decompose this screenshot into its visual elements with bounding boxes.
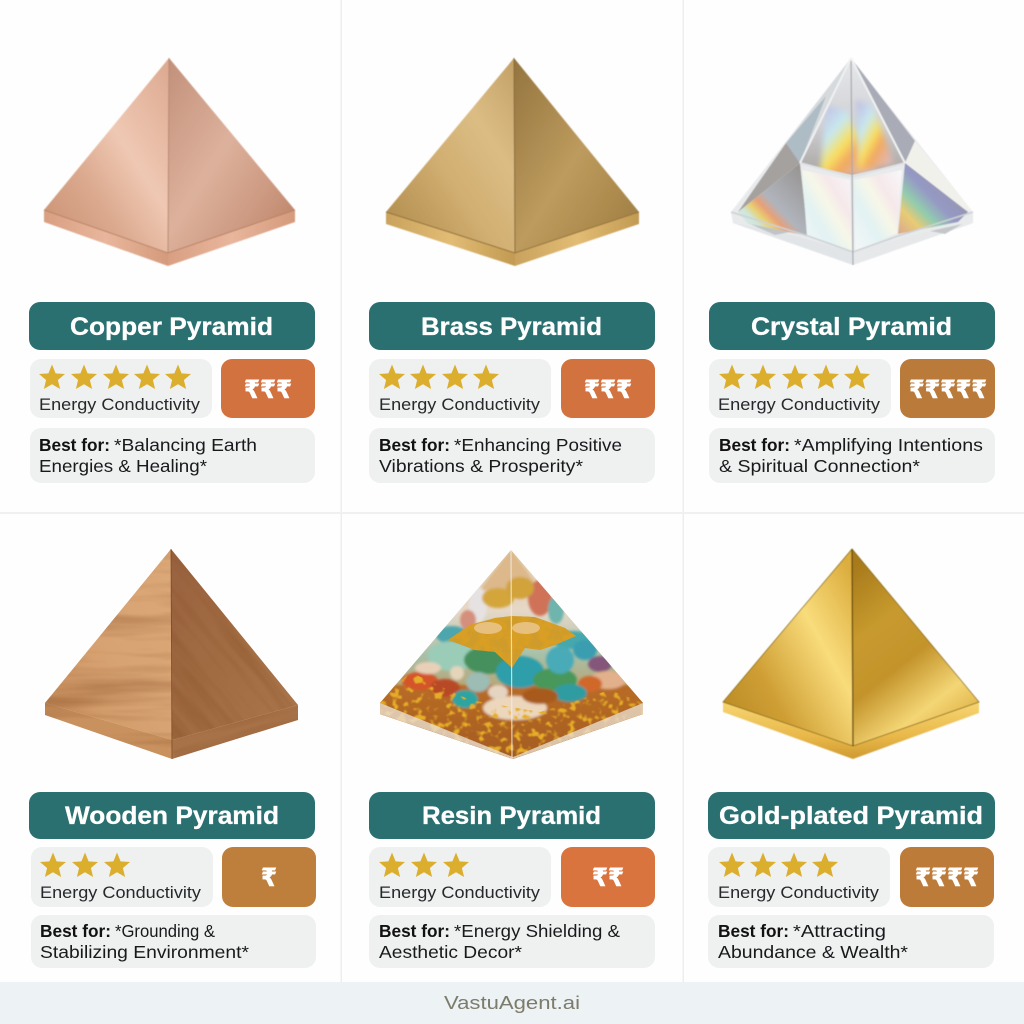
best for: brass [369, 428, 655, 483]
price badge: three rupees: ₹₹₹ [584, 375, 632, 404]
best for: copper: Best for: [39, 435, 110, 455]
rating card: 3 stars energy conductivity [369, 847, 551, 907]
price badge: four rupees: ₹₹₹₹ [915, 863, 979, 892]
rating card: 3 stars energy conductivity [31, 847, 213, 907]
best for: gold: Abundance & Wealth* [718, 942, 908, 962]
panel: Resin Pyramid [369, 545, 655, 968]
title bar: Wooden Pyramid: Wooden Pyramid [65, 802, 279, 830]
rating card: 5 stars energy conductivity [30, 359, 212, 418]
best for: wood: Stabilizing Environment* [40, 942, 249, 962]
footer [0, 982, 1024, 1024]
best for: wood [31, 915, 316, 968]
title bar: Brass Pyramid [369, 302, 655, 350]
title bar: Copper Pyramid [29, 302, 315, 350]
best for: gold: *Attracting [793, 921, 886, 941]
rating card: 5 stars energy conductivity: Energy Conductivity [39, 396, 201, 414]
footer: VastuAgent.ai [444, 992, 580, 1013]
pyramid image: resin orgonite [380, 550, 643, 759]
pyramid image: crystal [731, 58, 973, 265]
price badge: four rupees [900, 847, 994, 907]
rating card: 5 stars energy conductivity: Energy Conductivity [718, 396, 881, 414]
title bar: Copper Pyramid: Copper Pyramid [70, 313, 273, 341]
price badge: one rupee: ₹ [261, 863, 277, 892]
best for: gold: Best for: [718, 921, 789, 941]
panel: Crystal Pyramid [709, 58, 995, 483]
best for: wood: *Grounding & [115, 921, 215, 941]
title bar: Wooden Pyramid [29, 792, 315, 839]
pyramid image: gold [723, 549, 979, 759]
price badge: two rupees [561, 847, 655, 907]
rating card: 4 stars energy conductivity: Energy Conductivity [379, 396, 541, 414]
price badge: three rupees [221, 359, 315, 418]
panel: Brass Pyramid [369, 58, 655, 483]
best for: crystal: *Amplifying Intentions [794, 435, 983, 455]
best for: resin: *Energy Shielding & [454, 921, 620, 941]
best for: resin: Aesthetic Decor* [379, 942, 522, 962]
title bar: Crystal Pyramid [709, 302, 995, 350]
title bar: Resin Pyramid [369, 792, 655, 839]
best for: crystal [709, 428, 995, 483]
best for: wood: Best for: [40, 921, 111, 941]
best for: brass: *Enhancing Positive [454, 435, 622, 455]
rating card: 4 stars energy conductivity [708, 847, 890, 907]
title bar: Resin Pyramid: Resin Pyramid [422, 802, 601, 830]
title bar: Gold-plated Pyramid [708, 792, 995, 839]
best for: crystal: Best for: [719, 435, 790, 455]
best for: copper [30, 428, 315, 483]
panel: Wooden Pyramid [29, 549, 316, 968]
price badge: five rupees: ₹₹₹₹₹ [909, 375, 987, 404]
rating card: 5 stars energy conductivity [709, 359, 891, 418]
price badge: two rupees: ₹₹ [592, 863, 624, 892]
best for: copper: *Balancing Earth [114, 435, 257, 455]
best for: copper: Energies & Healing* [39, 456, 207, 476]
best for: resin [369, 915, 655, 968]
price badge: three rupees [561, 359, 655, 418]
rating card: 4 stars energy conductivity: Energy Conductivity [718, 884, 880, 902]
best for: brass: Vibrations & Prosperity* [379, 456, 583, 476]
price badge: five rupees [900, 359, 995, 418]
best for: resin: Best for: [379, 921, 450, 941]
best for: crystal: & Spiritual Connection* [719, 456, 920, 476]
rating card: 4 stars energy conductivity [369, 359, 551, 418]
pyramid image: brass [386, 58, 639, 266]
title bar: Brass Pyramid: Brass Pyramid [421, 313, 602, 341]
pyramid image: wood [45, 549, 298, 759]
price badge: one rupee [222, 847, 316, 907]
pyramid image: copper [44, 58, 295, 266]
price badge: three rupees: ₹₹₹ [244, 375, 292, 404]
panel: Copper Pyramid [29, 58, 315, 483]
rating card: 3 stars energy conductivity: Energy Conductivity [40, 884, 202, 902]
title bar: Gold-plated Pyramid: Gold-plated Pyramid [719, 802, 983, 830]
rating card: 3 stars energy conductivity: Energy Conductivity [379, 884, 541, 902]
panel: Gold-plated Pyramid [708, 549, 995, 968]
best for: gold [708, 915, 994, 968]
best for: brass: Best for: [379, 435, 450, 455]
title bar: Crystal Pyramid: Crystal Pyramid [751, 313, 952, 341]
